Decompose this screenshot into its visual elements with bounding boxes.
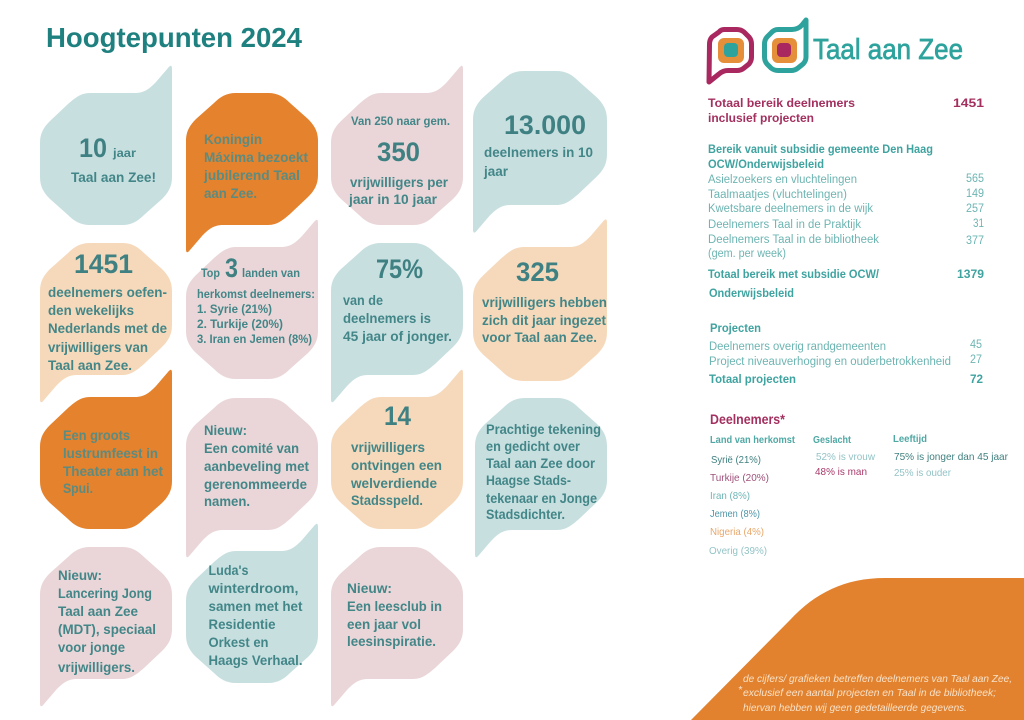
bubble: 75%: deelnemers is: [343, 311, 431, 326]
bubble: 75%: 75%: [376, 254, 423, 284]
table: bereik subsidie: Taalmaatjes (vluchtelingen): [708, 189, 847, 201]
table: projecten: Projecten: [710, 321, 761, 335]
bubble: comite van aanbeveling: Nieuw:: [204, 423, 247, 438]
list: land van herkomst: Nigeria (4%): [710, 526, 764, 538]
table: projecten: 72: [970, 372, 983, 386]
bubble: tekening en gedicht: Prachtige tekening: [486, 422, 601, 437]
list: land van herkomst: Turkije (20%): [710, 472, 769, 484]
table: bereik subsidie: Kwetsbare deelnemers in de wijk: [708, 203, 873, 215]
bubble: comite van aanbeveling: aanbeveling met: [204, 459, 309, 474]
bubble: lustrumfeest: lustrumfeest in: [63, 446, 158, 461]
bubble: Koningin Maxima: [186, 93, 318, 252]
bubble: top 3 landen: landen van: [242, 266, 300, 280]
table: projecten: 45: [970, 339, 982, 351]
table: bereik subsidie: 149: [966, 188, 984, 200]
bubble: Jong Taal aan Zee: vrijwilligers.: [58, 660, 135, 675]
bubble: 75%: van de: [343, 293, 383, 308]
bubble: 10 jaar: [40, 66, 172, 225]
bubble: 350 vrijwilligers: vrijwilligers per: [350, 175, 449, 190]
bubble: 350 vrijwilligers: Van 250 naar gem.: [351, 114, 450, 128]
bubble: 325 vrijwilligers: voor Taal aan Zee.: [482, 330, 597, 345]
list: leeftijd: Leeftijd: [893, 433, 927, 445]
bubble: Luda's winterdroom: samen met het: [208, 599, 303, 614]
table: bereik subsidie: Deelnemers Taal in de bibliotheek: [708, 234, 879, 246]
bubble: 13.000 deelnemers: jaar: [483, 164, 509, 179]
bubble: 75%: [331, 243, 463, 402]
bubble: 14 vrijwilligers: ontvingen een: [351, 458, 442, 473]
bubble: 1451 deelnemers: vrijwilligers van: [48, 340, 148, 355]
heading: deelnemers: Deelnemers*: [710, 411, 785, 427]
text block: totaal bereik: Totaal bereik deelnemers: [708, 96, 855, 110]
bubble: top 3 landen: [186, 220, 318, 379]
bubble: 13.000 deelnemers: [473, 71, 607, 233]
list: land van herkomst: Jemen (8%): [710, 508, 760, 520]
icon: magenta speech bubble: [709, 30, 752, 82]
list: geslacht: [813, 434, 875, 478]
bubble: Jong Taal aan Zee: (MDT), speciaal: [58, 622, 156, 637]
bubble: 14 vrijwilligers: Stadsspeld.: [351, 493, 423, 508]
section: deelnemers: [709, 411, 1008, 557]
bubble: Koningin Maxima: aan Zee.: [204, 186, 257, 201]
bubble: Luda's winterdroom: Residentie: [208, 617, 276, 632]
table: bereik subsidie: OCW/Onderwijsbeleid: [708, 157, 824, 171]
list: geslacht: Geslacht: [813, 434, 851, 446]
bubble: leesclub: [331, 547, 463, 706]
text block: totaal bereik: [708, 96, 984, 125]
bubble: 13.000 deelnemers: deelnemers in 10: [484, 145, 593, 160]
bubble: comite van aanbeveling: namen.: [204, 494, 250, 509]
bubble: tekening en gedicht: en gedicht over: [486, 439, 581, 454]
panel: orange footnote: [691, 578, 1024, 720]
bubble: 75%: 45 jaar of jonger.: [343, 329, 452, 344]
logo wordmark: Taal aan Zee: [813, 34, 963, 66]
list: land van herkomst: Syrië (21%): [711, 454, 761, 466]
bubble: comite van aanbeveling: Een comité van: [204, 441, 299, 456]
bubble: lustrumfeest: Theater aan het: [63, 464, 164, 479]
bubble: Jong Taal aan Zee: [40, 547, 172, 706]
panel: orange footnote: hiervan hebben wij geen gedetailleerde gegevens.: [743, 702, 967, 714]
bubble: 325 vrijwilligers: zich dit jaar ingezet: [482, 313, 606, 328]
bubble: 325 vrijwilligers: vrijwilligers hebben: [482, 295, 607, 310]
text block: totaal bereik: inclusief projecten: [708, 111, 814, 125]
bubble: 325 vrijwilligers: 325: [516, 257, 559, 287]
table: bereik subsidie: Onderwijsbeleid: [709, 286, 794, 300]
bubble: tekening en gedicht: Haagse Stads-: [486, 473, 571, 488]
panel: orange footnote: exclusief een aantal projecten en Taal in de bibliotheek;: [743, 687, 996, 699]
bubble: top 3 landen: Top: [201, 266, 220, 280]
list: leeftijd: 75% is jonger dan 45 jaar: [894, 451, 1008, 463]
bubble: 350 vrijwilligers: 350: [377, 137, 420, 167]
bubble: tekening en gedicht: [475, 398, 607, 557]
table: projecten: [709, 321, 983, 386]
bubble: 10 jaar: 10: [79, 133, 107, 163]
bubble: 325 vrijwilligers: [473, 219, 607, 381]
bubble: Koningin Maxima: Máxima bezoekt: [204, 150, 308, 165]
bubble: tekening en gedicht: tekenaar en Jonge: [486, 491, 597, 506]
bubble: Jong Taal aan Zee: voor jonge: [58, 640, 125, 655]
bubble: leesclub: Een leesclub in: [347, 599, 442, 614]
bubble: leesclub: Nieuw:: [347, 581, 392, 596]
list: land van herkomst: Land van herkomst: [710, 434, 795, 446]
bubble: 10 jaar: Taal aan Zee!: [71, 170, 156, 185]
bubble: top 3 landen: herkomst deelnemers:: [197, 287, 315, 301]
bubble: 14 vrijwilligers: vrijwilligers: [351, 440, 425, 455]
table: bereik subsidie: Totaal bereik met subsidie OCW/: [708, 267, 880, 281]
table: bereik subsidie: (gem. per week): [708, 248, 786, 260]
panel: orange footnote: *: [738, 684, 743, 696]
bubble: Luda's winterdroom: Orkest en: [208, 635, 268, 650]
bubble: 350 vrijwilligers: [331, 66, 463, 225]
list: land van herkomst: Overig (39%): [709, 545, 767, 557]
bubble: Luda's winterdroom: [186, 524, 318, 683]
list: leeftijd: 25% is ouder: [894, 467, 951, 479]
bubble: Koningin Maxima: jubilerend Taal: [203, 168, 300, 183]
bubble: top 3 landen: 2. Turkije (20%): [197, 317, 283, 331]
bubble: leesclub: een jaar vol: [347, 617, 421, 632]
bubble: 350 vrijwilligers: jaar in 10 jaar: [348, 192, 438, 207]
bubble: 14 vrijwilligers: [331, 370, 463, 529]
logo: Taal aan Zee: [709, 20, 963, 82]
bubble: 1451 deelnemers: [40, 243, 172, 402]
list: geslacht: 48% is man: [815, 466, 867, 478]
bubble: tekening en gedicht: Stadsdichter.: [486, 507, 565, 522]
table: bereik subsidie: [708, 142, 984, 300]
icon: teal speech bubble: [764, 20, 806, 70]
bubble: 14 vrijwilligers: welverdiende: [350, 476, 437, 491]
bubble: Koningin Maxima: Koningin: [204, 132, 262, 147]
bubble: Jong Taal aan Zee: Nieuw:: [58, 568, 102, 583]
table: bereik subsidie: 377: [966, 235, 984, 247]
text block: totaal bereik: 1451: [953, 96, 984, 110]
panel: orange footnote: de cijfers/ grafieken betreffen deelnemers van Taal aan Zee,: [743, 673, 1012, 685]
list: leeftijd: [893, 433, 1008, 479]
table: bereik subsidie: 31: [973, 218, 984, 230]
table: projecten: 27: [970, 354, 982, 366]
bubble: comite van aanbeveling: [186, 398, 318, 557]
bubble: tekening en gedicht: Taal aan Zee door: [486, 456, 596, 471]
table: bereik subsidie: 257: [966, 203, 984, 215]
bubble: 14 vrijwilligers: 14: [384, 401, 411, 431]
bubble: Luda's winterdroom: Haags Verhaal.: [208, 653, 302, 668]
table: bereik subsidie: Deelnemers Taal in de Praktijk: [708, 219, 861, 231]
bubble: top 3 landen: 3: [225, 253, 238, 283]
bubble: Jong Taal aan Zee: Taal aan Zee: [58, 604, 138, 619]
bubble: Luda's winterdroom: Luda's: [208, 563, 248, 578]
list: land van herkomst: [709, 434, 795, 557]
bubble: 1451 deelnemers: Nederlands met de: [48, 321, 167, 336]
table: bereik subsidie: Bereik vanuit subsidie gemeente Den Haag: [708, 142, 933, 156]
bubble: 1451 deelnemers: deelnemers oefen-: [48, 285, 167, 300]
table: bereik subsidie: 1379: [957, 267, 984, 281]
bubble: Luda's winterdroom: winterdroom,: [207, 581, 298, 596]
bubble: 1451 deelnemers: Taal aan Zee.: [48, 358, 132, 373]
table: projecten: Totaal projecten: [709, 372, 796, 386]
bubble: lustrumfeest: Spui.: [63, 481, 93, 496]
bubble: lustrumfeest: [40, 370, 172, 529]
bubble: comite van aanbeveling: gerenommeerde: [204, 477, 307, 492]
bubble: 1451 deelnemers: 1451: [74, 249, 133, 279]
bubble: lustrumfeest: Een groots: [63, 428, 130, 443]
list: geslacht: 52% is vrouw: [816, 451, 875, 463]
bubble: leesclub: leesinspiratie.: [347, 634, 436, 649]
bubble: 13.000 deelnemers: 13.000: [504, 110, 586, 140]
table: bereik subsidie: Asielzoekers en vluchtelingen: [708, 174, 857, 186]
bubble: Jong Taal aan Zee: Lancering Jong: [58, 586, 152, 601]
table: projecten: Deelnemers overig randgemeenten: [709, 341, 886, 353]
title: Hoogtepunten 2024: [46, 22, 302, 53]
bubble: top 3 landen: 1. Syrie (21%): [197, 302, 272, 316]
table: projecten: Project niveauverhoging en ouderbetrokkenheid: [709, 356, 951, 368]
bubble: 10 jaar: jaar: [112, 146, 136, 160]
bubble: 1451 deelnemers: den wekelijks: [48, 303, 134, 318]
table: bereik subsidie: 565: [966, 173, 984, 185]
list: land van herkomst: Iran (8%): [710, 490, 750, 502]
bubble: top 3 landen: 3. Iran en Jemen (8%): [197, 332, 312, 346]
